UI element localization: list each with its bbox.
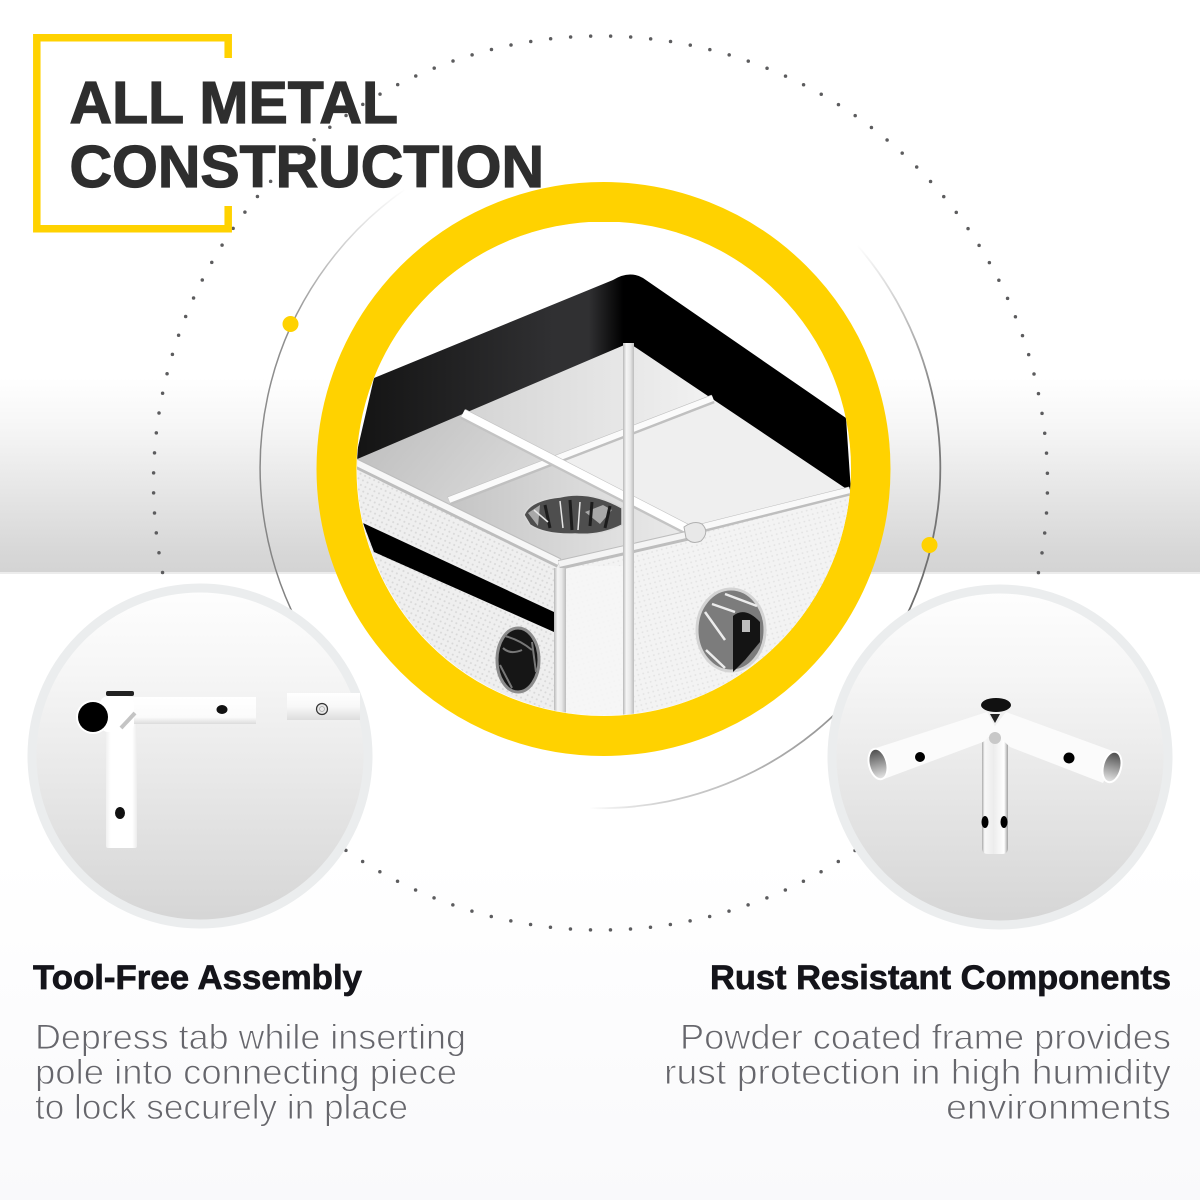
thin gray orbit arc: left <box>260 190 404 640</box>
title line 2: CONSTRUCTION <box>70 134 544 200</box>
right wall <box>559 488 855 720</box>
ceiling vent hole <box>524 495 622 534</box>
left wall <box>357 470 559 710</box>
pole joint <box>684 523 706 542</box>
corner vertical pole <box>554 568 566 718</box>
panel: left connector disc <box>32 588 368 924</box>
description: to lock securely in place <box>35 1088 408 1127</box>
ceiling cross pole <box>449 398 713 501</box>
ceiling panel: front <box>449 466 680 560</box>
front vertical pole <box>623 343 634 718</box>
icon: detached pole with push tab <box>287 693 360 720</box>
ceiling panel: top <box>470 346 708 455</box>
yellow accent dot: right <box>922 537 938 553</box>
description: pole into connecting piece <box>35 1053 457 1092</box>
disc <box>832 589 1168 925</box>
description <box>35 1018 466 1127</box>
disc <box>32 588 368 924</box>
thin gray orbit arc: right <box>857 245 940 675</box>
description <box>664 1018 1172 1127</box>
ceiling panel: back left <box>357 414 541 504</box>
title block with yellow bracket <box>37 38 544 229</box>
yellow accent dot: upper left <box>282 316 298 332</box>
right ceiling edge pole <box>559 490 850 565</box>
icon: two-way metal connector <box>76 691 256 848</box>
panel: central tent photo in yellow ring <box>336 202 870 736</box>
thin gray orbit arc: bottom right <box>589 675 870 808</box>
description: Powder coated frame provides <box>680 1018 1171 1057</box>
title line 1: ALL METAL <box>70 70 398 136</box>
description: rust protection in high humidity <box>664 1053 1172 1092</box>
description: Depress tab while inserting <box>35 1018 466 1057</box>
ceiling diagonal pole <box>463 413 692 532</box>
right wall duct port <box>697 589 765 672</box>
black top band <box>355 274 851 492</box>
left wall duct port <box>497 628 539 692</box>
yellow ring <box>336 202 870 736</box>
heading: Rust Resistant Components <box>710 959 1171 997</box>
description: environments <box>946 1088 1171 1127</box>
ceiling panel: right <box>566 400 844 524</box>
heading: Tool-Free Assembly <box>33 959 362 997</box>
dotted orbit circle <box>154 36 1048 930</box>
text block: tool-free assembly <box>33 959 466 1127</box>
black wall stripe <box>363 523 554 632</box>
panel: right connector disc <box>832 589 1168 925</box>
tent corner illustration <box>350 222 855 720</box>
text block: rust resistant components <box>664 959 1172 1127</box>
icon: three-way metal connector <box>866 698 1124 854</box>
yellow bracket frame <box>37 38 228 229</box>
left ceiling edge pole <box>355 462 559 563</box>
